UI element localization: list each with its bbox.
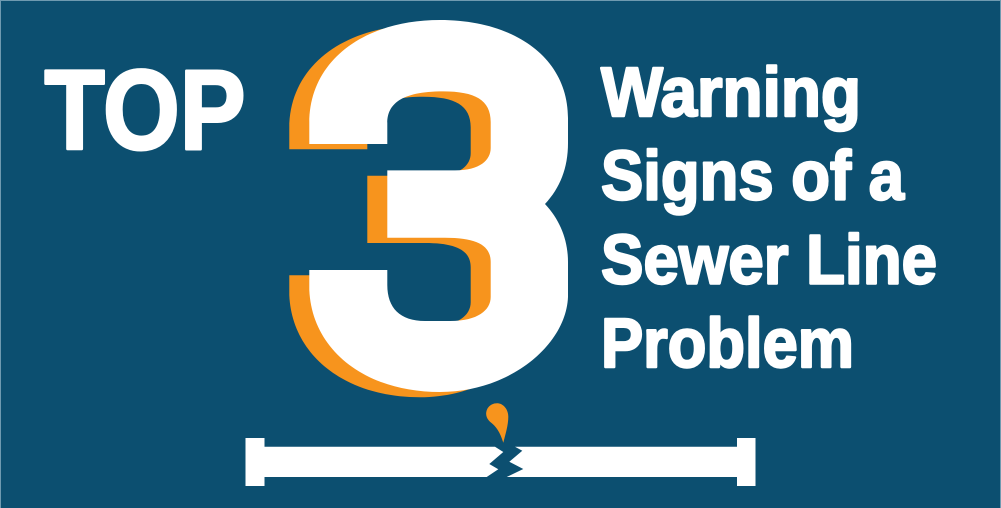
line: Warning: Warning xyxy=(601,53,861,131)
icon: broken pipe xyxy=(246,438,756,486)
heading: Warning Signs of a Sewer Line Problem xyxy=(601,53,937,382)
line: Signs of a: Signs of a xyxy=(601,136,905,214)
numeral 3 orange shadow xyxy=(289,25,548,397)
line: Problem: Problem xyxy=(601,304,854,382)
heading: TOP: TOP xyxy=(44,47,246,173)
numeral 3 white face xyxy=(309,20,568,392)
numeral 3 with orange shadow xyxy=(289,20,568,397)
pipe: left section xyxy=(246,438,503,486)
pipe: right section xyxy=(507,438,756,486)
icon: leaking drop xyxy=(486,403,508,443)
line: Sewer Line: Sewer Line xyxy=(601,220,937,298)
